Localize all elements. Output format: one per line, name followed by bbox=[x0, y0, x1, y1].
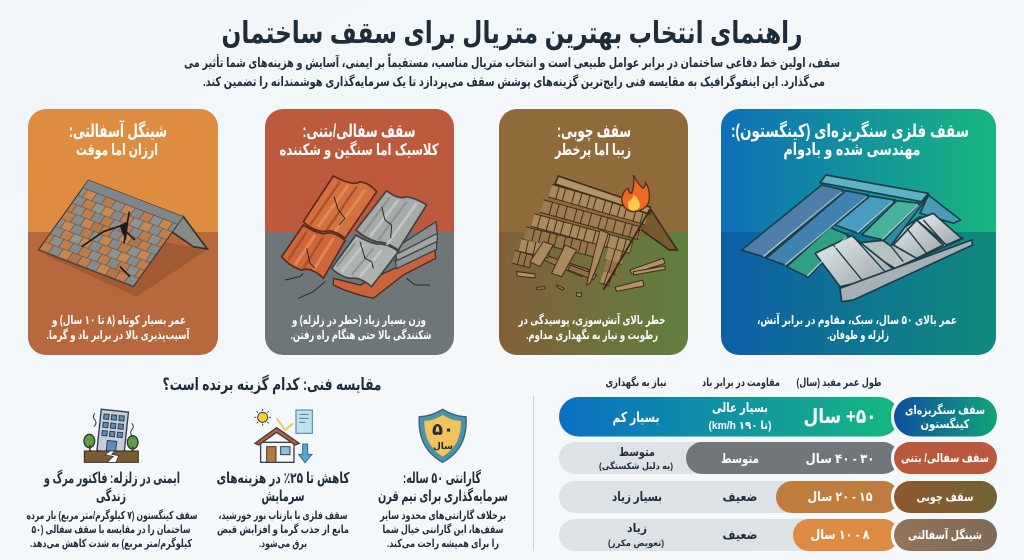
description: مانع از جذب گرما و افزایش قبض bbox=[217, 523, 349, 536]
description: برق می‌شود. bbox=[259, 538, 307, 550]
icon: house with sun and bill bbox=[254, 409, 312, 463]
description: زلزله و طوفان. bbox=[827, 328, 889, 343]
illustration: cracked shingle roof bbox=[38, 180, 207, 297]
description: عمر بسیار کوتاه (۸ تا ۱۰ سال) و bbox=[51, 313, 186, 328]
heading bbox=[43, 469, 180, 505]
illustration: cracked tiles bbox=[282, 176, 437, 298]
description: عمر بالای ۵۰ سال، سبک، مقاوم در برابر آتش، bbox=[757, 312, 957, 328]
heading: سرمایش bbox=[262, 488, 304, 505]
table row: Kingston: بسیار عالی bbox=[712, 400, 768, 415]
table row: asphalt shingle: ۸ - ۱۰ سال bbox=[810, 527, 870, 542]
description bbox=[518, 312, 666, 343]
description: را برای همیشه راحت می‌کند. bbox=[387, 538, 499, 550]
heading: زیبا اما پرخطر bbox=[554, 142, 631, 160]
description: ساختمان را در مقایسه با سقف سفالی (۵۰ bbox=[32, 524, 190, 536]
icon: flame bbox=[622, 175, 649, 212]
heading: زندگی bbox=[96, 487, 126, 505]
panel: Kingston stone-coated metal roof bbox=[721, 109, 996, 356]
description: آسیب‌پذیری بالا در برابر باد و گرما. bbox=[46, 327, 190, 343]
title: راهنمای انتخاب بهترین متریال برای سقف ساختمان bbox=[222, 17, 802, 50]
illustration: metal roof panels bbox=[742, 175, 973, 302]
table row: wood: ضعیف bbox=[722, 489, 758, 504]
heading bbox=[216, 470, 350, 505]
icon: warranty shield: ۵۰ bbox=[432, 420, 454, 439]
table row: Kingston: سقف سنگریزه‌ای bbox=[905, 403, 985, 417]
icon: warranty shield bbox=[419, 409, 466, 462]
description: سقف فلزی با بازتاب نور خورشید، bbox=[218, 510, 348, 522]
heading: ایمنی در زلزله: فاکتور مرگ و bbox=[43, 469, 180, 487]
table row: Kingston: کینگستون bbox=[920, 417, 970, 432]
table row: asphalt shingle: ضعیف bbox=[722, 527, 758, 542]
section heading: technical comparison: مقایسه فنی: کدام گزینه برنده است؟ bbox=[162, 374, 382, 395]
table row: wood: بسیار زیاد bbox=[612, 489, 662, 504]
description: سقف‌ها، این گارانتی خیال شما bbox=[382, 523, 504, 536]
table column headers bbox=[606, 376, 882, 389]
feature: cooling cost reduction bbox=[216, 409, 350, 550]
description: شکنندگی بالا حتی هنگام راه رفتن. bbox=[290, 328, 432, 343]
table column headers: مقاومت در برابر باد bbox=[702, 377, 780, 389]
description: رطوبت و نیاز به نگهداری مداوم. bbox=[526, 328, 658, 343]
table row: clay tile: سقف سفالی/ بتنی bbox=[901, 451, 989, 465]
table row: clay tile: ۳۰ - ۴۰ سال bbox=[806, 451, 874, 466]
heading bbox=[280, 121, 439, 159]
table row: asphalt shingle bbox=[559, 517, 999, 553]
heading: سرمایه‌گذاری برای نیم قرن bbox=[378, 487, 508, 505]
table row: Kingston: ۵۰+ سال bbox=[804, 406, 876, 428]
table row: clay tile: متوسط bbox=[721, 451, 759, 466]
table row: wood: سقف چوبی bbox=[916, 490, 974, 505]
table column headers: طول عمر مفید (سال) bbox=[796, 377, 882, 389]
heading: گارانتی ۵۰ ساله: bbox=[403, 469, 481, 487]
heading: شینگل آسفالتی: bbox=[69, 119, 167, 141]
table row: Kingston: (تا ۱۹۰ km/h) bbox=[708, 420, 772, 432]
table row: asphalt shingle: زیاد bbox=[627, 521, 647, 535]
table row: wood: ۱۵ - ۲۰ سال bbox=[808, 489, 873, 504]
description bbox=[290, 313, 432, 343]
feature: 50 year warranty bbox=[378, 409, 508, 550]
heading: کلاسیک اما سنگین و شکننده bbox=[280, 140, 439, 159]
illustration: decayed wood roof with flame bbox=[513, 176, 677, 297]
description: کیلوگرم/متر مربع) به شدت کاهش می‌دهد. bbox=[30, 537, 192, 550]
panel: asphalt shingle bbox=[28, 109, 218, 356]
heading bbox=[731, 120, 969, 160]
description: وزن بسیار زیاد (خطر در زلزله) و bbox=[291, 313, 426, 328]
table row: clay tile: متوسط bbox=[619, 445, 655, 460]
description bbox=[757, 312, 957, 343]
table row: wood bbox=[559, 479, 999, 515]
description: برخلاف گارانتی‌های محدود سایر bbox=[379, 509, 506, 522]
heading: سقف چوبی: bbox=[557, 121, 631, 142]
table row: asphalt shingle: شینگل آسفالتی bbox=[908, 527, 982, 542]
table row: clay tile: (به دلیل شکستگی) bbox=[599, 460, 673, 471]
table row: asphalt shingle: (تعویض مکرر) bbox=[608, 538, 664, 549]
panel: wood roof bbox=[499, 109, 688, 356]
comparison table bbox=[559, 376, 999, 553]
heading bbox=[378, 469, 508, 505]
description: خطر بالای آتش‌سوزی، پوسیدگی در bbox=[518, 312, 666, 328]
table row: Kingston: بسیار کم bbox=[612, 409, 660, 425]
feature: earthquake safety bbox=[27, 409, 198, 550]
description bbox=[27, 509, 198, 550]
panel: clay and concrete tile bbox=[265, 109, 454, 356]
heading: مهندسی شده و بادوام bbox=[784, 140, 920, 160]
heading bbox=[69, 119, 167, 159]
description: سقف کینگستون (۷ کیلوگرم/متر مربع) بار مرده bbox=[27, 509, 198, 522]
heading: ارزان اما موقت bbox=[76, 142, 158, 159]
description bbox=[379, 509, 506, 550]
heading: کاهش تا ۲۵٪ در هزینه‌های bbox=[216, 470, 350, 487]
icon: warranty shield: سال bbox=[433, 441, 453, 451]
icon: building on cracked ground bbox=[84, 409, 138, 462]
heading: سقف سفالی/بتنی: bbox=[302, 121, 416, 141]
intro paragraph bbox=[184, 53, 840, 89]
table column headers: نیاز به نگهداری bbox=[606, 376, 666, 389]
heading bbox=[554, 121, 631, 160]
description bbox=[217, 510, 349, 550]
table row: Kingston bbox=[559, 395, 999, 438]
table row: clay tile bbox=[559, 440, 999, 476]
intro paragraph: می‌گذارد. این اینفوگرافیک به مقایسه فنی رایج‌ترین گزینه‌های پوشش سقف می‌پردازد تا یک سرمایه‌گذاری هوشمندانه را تضمین کند. bbox=[203, 74, 825, 89]
description bbox=[46, 313, 190, 343]
